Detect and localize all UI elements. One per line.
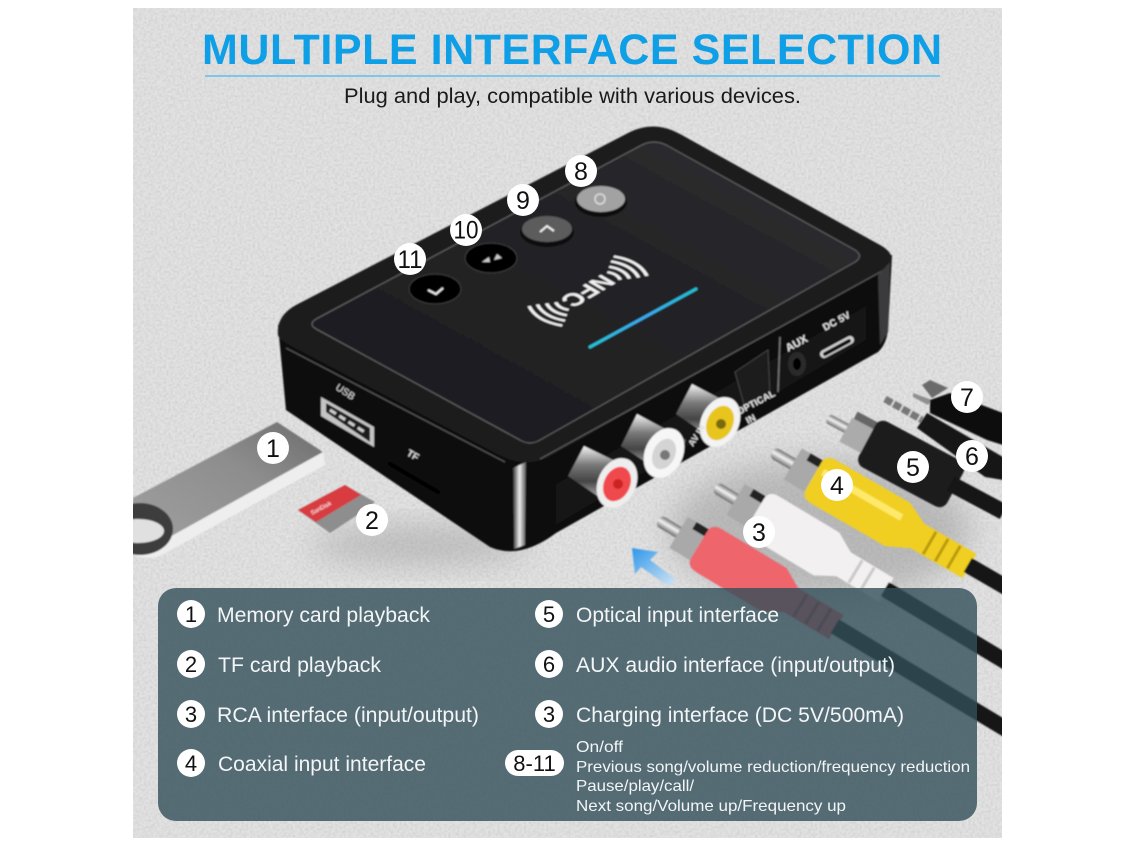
rear recess (556, 306, 866, 525)
item 3: 3 (185, 702, 197, 727)
badge 11: 11 (398, 246, 422, 274)
title: MULTIPLE INTERFACE SELECTION (202, 26, 942, 74)
AUX label: AUX (784, 333, 810, 355)
badge 2 (356, 504, 388, 536)
badge 10: 10 (454, 216, 478, 244)
subtitle: Plug and play, compatible with various devices. (344, 85, 801, 108)
AUX jack (788, 352, 806, 376)
red RCA socket (567, 444, 639, 510)
yellow RCA plug (760, 430, 1050, 627)
drive bevel (133, 449, 325, 558)
badge 3 (743, 516, 775, 548)
front corner gloss (513, 462, 526, 549)
yellow RCA socket (675, 382, 742, 448)
item 7: 3 (543, 702, 555, 727)
divider (778, 337, 780, 392)
USB port (321, 397, 374, 447)
card red label (298, 485, 361, 522)
optical port (735, 350, 770, 408)
badge 1 (257, 432, 289, 464)
button 10: play pause (465, 243, 517, 273)
device body (278, 126, 892, 551)
button 9: next (520, 216, 574, 247)
rear corner gloss (878, 262, 890, 345)
badge 9: 9 (516, 187, 530, 215)
TF slot (390, 464, 438, 492)
item 2: TF card playback (218, 654, 382, 677)
optical in label: IN (744, 412, 758, 427)
button descriptions: Previous song/volume reduction/frequency reduction (576, 759, 970, 776)
item 4: Coaxial input interface (218, 753, 426, 776)
device side faces (278, 255, 892, 551)
product photo illustration (133, 126, 1002, 738)
inner top panel (312, 142, 860, 443)
item 2 (177, 650, 382, 678)
badge 6 (956, 440, 988, 472)
TF label: TF (404, 448, 421, 464)
badge 4 (821, 469, 853, 501)
memory card (298, 485, 375, 533)
NFC logo (525, 254, 651, 328)
callout badges on product (257, 155, 988, 548)
white RCA plug (702, 466, 1035, 693)
item 8-11 (505, 750, 564, 776)
badge 7 (951, 381, 983, 413)
button 8: power (575, 186, 627, 217)
right legend column (505, 600, 904, 776)
title rule (205, 75, 940, 77)
USB label: USB (333, 382, 357, 403)
badge 7: 7 (960, 384, 974, 412)
item 6: 6 (543, 652, 555, 677)
card body (298, 485, 375, 533)
cable 7: USB-C (913, 380, 1003, 445)
blue insert arrow (632, 548, 677, 586)
badge 8: 8 (574, 158, 588, 186)
LED strip (590, 289, 696, 347)
drive face (133, 422, 323, 547)
item 4 (177, 749, 426, 777)
item 1 (177, 600, 430, 628)
NFC label: NFC (553, 271, 620, 310)
button descriptions: On/off (576, 739, 624, 756)
button descriptions (576, 739, 970, 815)
card brand: SanDisk (310, 501, 334, 517)
white RCA socket (620, 412, 687, 478)
badge 8 (565, 155, 597, 187)
DC label: DC 5V (821, 310, 853, 334)
red RCA plug (645, 499, 1036, 761)
optical label: OPTICAL (735, 388, 777, 418)
badge 1: 1 (266, 435, 280, 463)
panel: interface legend (158, 588, 977, 821)
item 5: 5 (543, 602, 555, 627)
item 7: Charging interface (DC 5V/500mA) (576, 704, 904, 727)
item 1: Memory card playback (217, 604, 430, 627)
cable 5: optical (814, 396, 1015, 536)
recess edge highlight (286, 270, 884, 462)
badge 6: 6 (965, 443, 979, 471)
item 3: RCA interface (input/output) (217, 704, 479, 727)
USB flash drive (107, 422, 325, 558)
item 6: AUX audio interface (input/output) (576, 654, 895, 677)
AV IN label: AV IN (686, 423, 707, 448)
item 4: 4 (185, 751, 197, 776)
left legend column (177, 600, 479, 777)
badge 5: 5 (906, 454, 920, 482)
button descriptions: Pause/play/call/ (576, 778, 695, 795)
button 11: previous (409, 274, 461, 304)
photo backdrop (133, 8, 1002, 838)
badge 2: 2 (365, 507, 379, 535)
badge 4: 4 (830, 472, 844, 500)
device top surface (278, 126, 891, 462)
item 5: Optical input interface (576, 604, 779, 627)
badge 5 (897, 451, 929, 483)
button descriptions: Next song/Volume up/Frequency up (576, 798, 846, 815)
item 5 (535, 600, 779, 628)
item 1: 1 (185, 602, 197, 627)
badge 3: 3 (752, 519, 766, 547)
badge 9 (507, 184, 539, 216)
NFC waves (525, 254, 651, 328)
key hole (133, 502, 174, 556)
panel background (158, 588, 977, 821)
item 2: 2 (185, 652, 197, 677)
DC port (824, 340, 850, 354)
cable 6: AUX (885, 399, 1003, 480)
item 8-11: 8-11 (513, 751, 556, 776)
